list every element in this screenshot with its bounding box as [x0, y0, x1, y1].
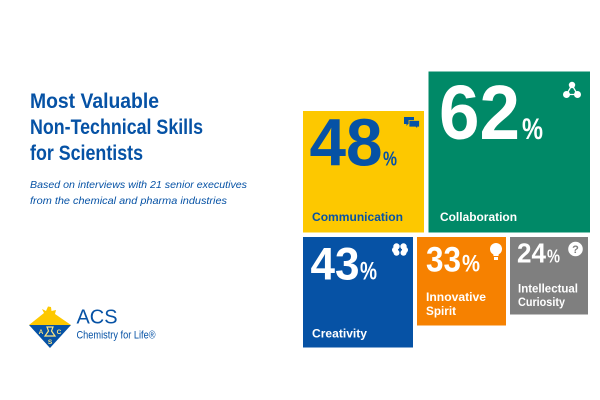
- title: Non-Technical Skills: [30, 116, 203, 139]
- panel: innovative spirit: [417, 237, 506, 326]
- panel: collaboration: [428, 70, 590, 232]
- label: Intellectual: [518, 282, 578, 296]
- icon: question mark: ?: [572, 244, 579, 256]
- logo wordmark: ACS: [76, 306, 118, 328]
- panel: intellectual curiosity: [510, 237, 588, 314]
- label: Communication: [312, 210, 403, 224]
- percent sign: %: [360, 258, 377, 286]
- panel: communication: [303, 106, 424, 232]
- label: Innovative: [426, 290, 486, 304]
- logo emblem: C: [57, 329, 62, 336]
- value: 33: [426, 240, 461, 280]
- logo: ACS: [29, 306, 156, 348]
- title: for Scientists: [30, 142, 143, 165]
- subtitle: Based on interviews with 21 senior executives: [30, 179, 248, 191]
- subtitle: [30, 179, 248, 207]
- value: 48: [310, 106, 382, 180]
- value: 43: [310, 238, 360, 290]
- label: [426, 290, 486, 318]
- label: Spirit: [426, 304, 456, 318]
- label: Creativity: [312, 326, 367, 340]
- panel: creativity: [303, 237, 413, 348]
- icon: speech bubbles: [404, 117, 420, 129]
- percent sign: %: [383, 148, 397, 170]
- label: [518, 282, 578, 309]
- percent sign: %: [547, 246, 560, 266]
- logo emblem: [29, 306, 71, 348]
- label: Curiosity: [518, 295, 565, 309]
- icon: network: [563, 82, 581, 98]
- title: Most Valuable: [30, 90, 159, 113]
- logo emblem: A: [39, 329, 44, 336]
- title: [30, 90, 203, 165]
- value: 62: [439, 70, 520, 156]
- icon: brain: [392, 243, 408, 256]
- subtitle: from the chemical and pharma industries: [30, 195, 228, 207]
- logo emblem: S: [48, 339, 53, 346]
- percent sign: %: [462, 250, 480, 278]
- value: 24: [517, 238, 546, 268]
- percent sign: %: [522, 113, 543, 146]
- label: Collaboration: [440, 210, 517, 224]
- logo tagline: Chemistry for Life®: [76, 330, 156, 342]
- icon: light bulb: [490, 243, 502, 260]
